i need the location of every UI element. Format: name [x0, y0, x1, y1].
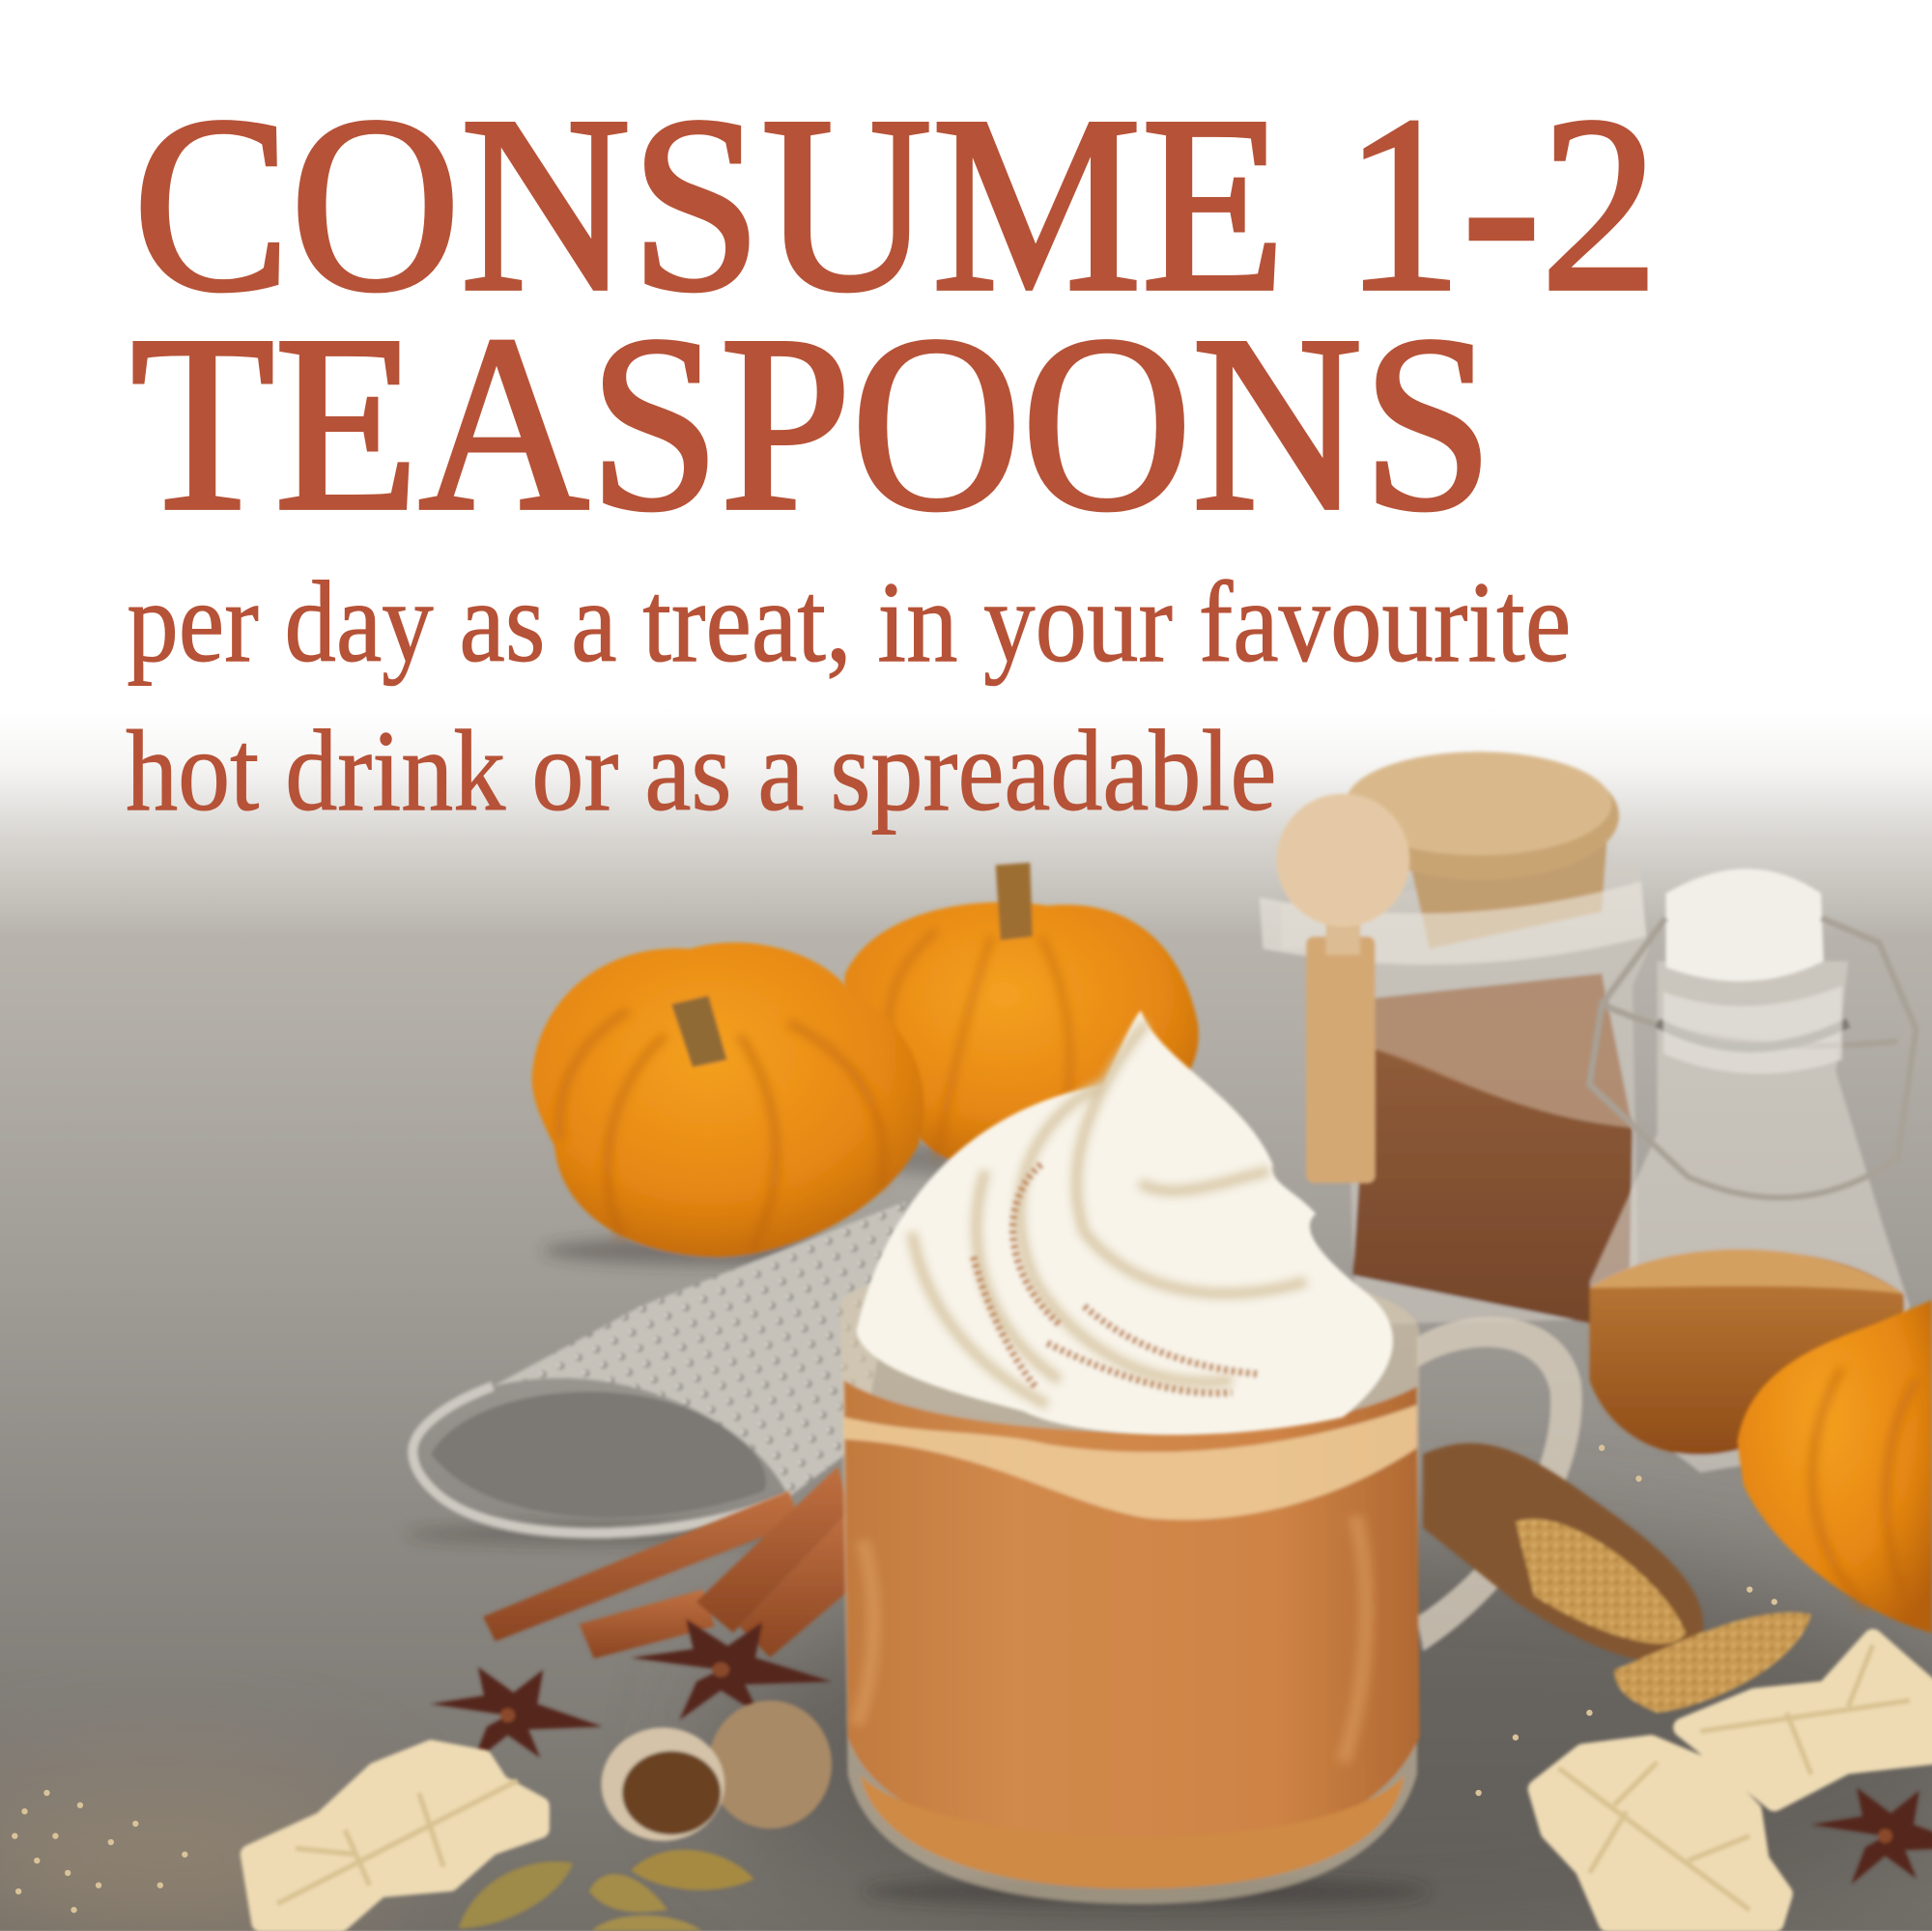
nutmeg and cardamom: [458, 1700, 832, 1931]
back pumpkin: [844, 863, 1199, 1178]
jar of spice with cork and wooden scoop: [1260, 752, 1649, 1331]
title: [130, 66, 1659, 563]
right pumpkin: [1737, 1300, 1932, 1633]
cinnamon sticks: [483, 1466, 850, 1659]
title: CONSUME 1-2: [133, 66, 1659, 344]
star anise: [431, 1619, 1932, 1885]
left pumpkin: [532, 943, 923, 1265]
subtitle: [126, 557, 1571, 835]
whipped cream swirl: [856, 1010, 1393, 1434]
leaf shaped cookies: [250, 1639, 1932, 1922]
metal grater: [407, 1202, 906, 1546]
mug of pumpkin latte: [840, 1263, 1582, 1906]
title: TEASPOONS: [130, 285, 1493, 563]
scattered seeds: [12, 1445, 1777, 1913]
cookie leaf veins: [277, 1645, 1910, 1910]
subtitle: hot drink or as a spreadable: [126, 706, 1276, 835]
swing-top bottle of caramel syrup: [1589, 868, 1916, 1472]
wooden scoop with brown sugar: [1423, 1443, 1811, 1713]
subtitle: per day as a treat, in your favourite: [127, 557, 1571, 686]
